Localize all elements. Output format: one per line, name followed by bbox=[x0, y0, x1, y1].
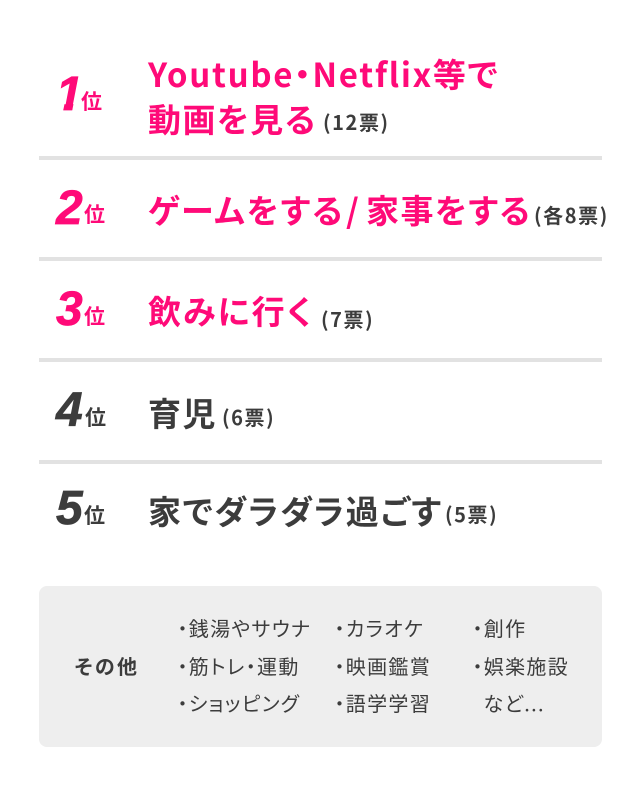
rank 1 unit: 位 bbox=[81, 86, 102, 116]
rank 2 row bbox=[54, 182, 609, 235]
rank 1 votes: (12票) bbox=[323, 107, 390, 136]
rank 1 title line 1: Youtube・Netflix等で bbox=[148, 49, 499, 97]
item: ・娯楽施設 bbox=[472, 651, 569, 680]
item: ・映画鑑賞 bbox=[334, 651, 431, 680]
item: ・銭湯やサウナ bbox=[178, 613, 311, 642]
list column 3 bbox=[472, 613, 569, 717]
rank 3 row bbox=[56, 283, 374, 336]
panel: others bbox=[38, 586, 602, 747]
rank 4 row bbox=[54, 384, 275, 437]
list column 2 bbox=[334, 613, 431, 717]
rank 1 row bbox=[60, 49, 499, 142]
rank 2 votes: (各8票) bbox=[534, 200, 609, 229]
rank 2 row: 家事をする bbox=[366, 185, 531, 233]
rank 5 votes: (5票) bbox=[445, 499, 498, 528]
item: など... bbox=[484, 688, 545, 717]
item: ・語学学習 bbox=[334, 688, 431, 717]
rank 5 unit: 位 bbox=[84, 500, 105, 530]
rank 4 votes: (6票) bbox=[222, 402, 275, 431]
rank 1 title line 2: 動画を見る bbox=[148, 94, 317, 142]
rank 4 title: 育児 bbox=[148, 388, 217, 436]
rank 3 votes: (7票) bbox=[321, 304, 374, 333]
rank 3 title: 飲みに行く bbox=[148, 286, 313, 334]
others heading: その他 bbox=[74, 651, 140, 680]
rank 3 number: 3 bbox=[56, 283, 83, 336]
rank 4 unit: 位 bbox=[85, 402, 106, 432]
rank 5 number: 5 bbox=[56, 482, 83, 535]
rank 2 title: ゲームをする bbox=[148, 185, 344, 233]
rank 5 row bbox=[56, 482, 498, 535]
rank 2 row: / bbox=[346, 185, 361, 233]
list column 1 bbox=[178, 613, 311, 717]
rank 2 number: 2 bbox=[56, 182, 83, 235]
rank 1 number: 1 bbox=[56, 68, 83, 121]
item: ・筋トレ・運動 bbox=[178, 651, 300, 680]
rank 5 title: 家でダラダラ過ごす bbox=[148, 486, 443, 534]
rank 4 number: 4 bbox=[56, 384, 83, 437]
rank 2 unit: 位 bbox=[84, 199, 105, 229]
item: ・創作 bbox=[472, 613, 526, 642]
rank 3 unit: 位 bbox=[84, 301, 105, 331]
rank 2 title bbox=[148, 185, 531, 233]
item: ・ショッピング bbox=[178, 688, 300, 717]
item: ・カラオケ bbox=[334, 613, 424, 642]
